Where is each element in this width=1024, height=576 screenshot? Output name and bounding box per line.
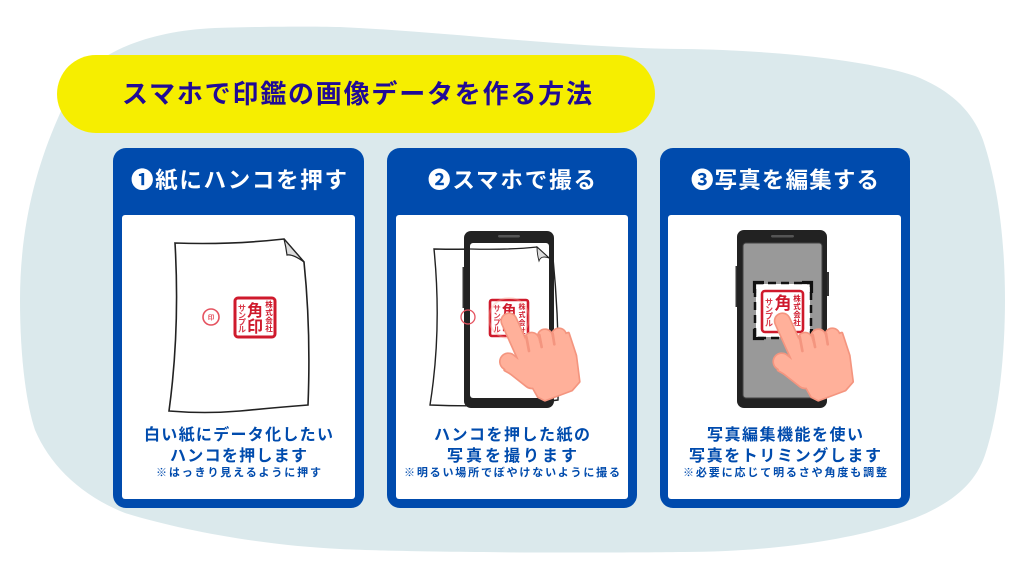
square stamp: 株 xyxy=(265,300,273,309)
icon: paper behind phone xyxy=(430,247,558,406)
square stamp on screen: 印 xyxy=(501,318,517,335)
step 3 caption: 写真をトリミングします xyxy=(689,446,881,465)
step 1 caption xyxy=(144,425,333,479)
icon: paper with stamps xyxy=(169,239,309,412)
step 2 caption: 写真を撮ります xyxy=(447,447,577,465)
small stamp on screen xyxy=(461,310,475,324)
step 2 caption: ※明るい場所でぼやけないように撮る xyxy=(404,465,620,479)
step 3 caption xyxy=(683,425,887,479)
step 1 caption: 白い紙にデータ化したい xyxy=(144,425,333,444)
square stamp: ル xyxy=(238,325,246,334)
square stamp on screen: 角 xyxy=(501,302,517,320)
square stamp on screen: サ xyxy=(765,298,773,307)
step 2 caption: ハンコを押した紙の xyxy=(434,426,590,444)
square stamp: プ xyxy=(238,318,246,327)
square stamp xyxy=(235,298,275,337)
square stamp: 式 xyxy=(265,307,273,317)
square stamp on screen: 株 xyxy=(793,294,801,303)
square stamp on screen: プ xyxy=(765,312,773,321)
square stamp on screen: 会 xyxy=(518,318,526,327)
step 2 heading: ❷スマホで撮る xyxy=(428,168,596,193)
small round stamp xyxy=(203,309,219,325)
square stamp on screen: ル xyxy=(493,325,501,334)
square stamp on screen: 角 xyxy=(774,293,792,313)
square stamp on screen xyxy=(762,291,803,332)
step 3 heading: ❸写真を編集する xyxy=(691,168,879,193)
step 1 heading: ❶紙にハンコを押す xyxy=(131,168,347,193)
square stamp: サ xyxy=(238,304,246,313)
square stamp on screen: サ xyxy=(493,304,501,313)
square stamp: 印 xyxy=(247,317,263,336)
panel: step 1 xyxy=(113,148,364,508)
panel: step 2 xyxy=(387,148,637,508)
icon: pointing hand xyxy=(778,321,852,400)
square stamp on screen: 社 xyxy=(518,326,526,335)
square stamp on screen: 式 xyxy=(518,310,526,319)
icon: pointing hand xyxy=(505,321,579,400)
step 3 caption: ※必要に応じて明るさや角度も調整 xyxy=(683,465,887,479)
icon: smartphone with crop xyxy=(736,230,829,408)
square stamp on screen: ン xyxy=(765,305,773,314)
square stamp on screen: プ xyxy=(493,318,501,327)
square stamp: 角 xyxy=(247,301,263,320)
step 2 caption xyxy=(404,426,620,479)
icon: smartphone xyxy=(461,231,554,408)
square stamp on screen: 株 xyxy=(518,303,526,311)
square stamp on screen: ル xyxy=(765,319,773,328)
tap ripple xyxy=(489,298,529,338)
step 1 caption: ハンコを押します xyxy=(170,447,307,465)
square stamp on screen: 式 xyxy=(793,301,801,311)
square stamp on screen: 会 xyxy=(793,309,801,319)
panel: step 3 xyxy=(660,148,910,508)
step 1 caption: ※はっきり見えるように押す xyxy=(156,465,321,479)
square stamp on screen xyxy=(490,300,528,336)
title banner xyxy=(57,55,655,133)
square stamp: ン xyxy=(238,311,246,320)
square stamp: 会 xyxy=(265,315,273,325)
square stamp on screen: ン xyxy=(493,311,501,320)
step 3 caption: 写真編集機能を使い xyxy=(707,425,863,444)
title banner: スマホで印鑑の画像データを作る方法 xyxy=(122,79,592,109)
small round stamp: 印 xyxy=(208,312,215,322)
square stamp: 社 xyxy=(265,323,273,333)
square stamp on screen: 社 xyxy=(793,317,801,327)
crop frame xyxy=(754,282,812,338)
